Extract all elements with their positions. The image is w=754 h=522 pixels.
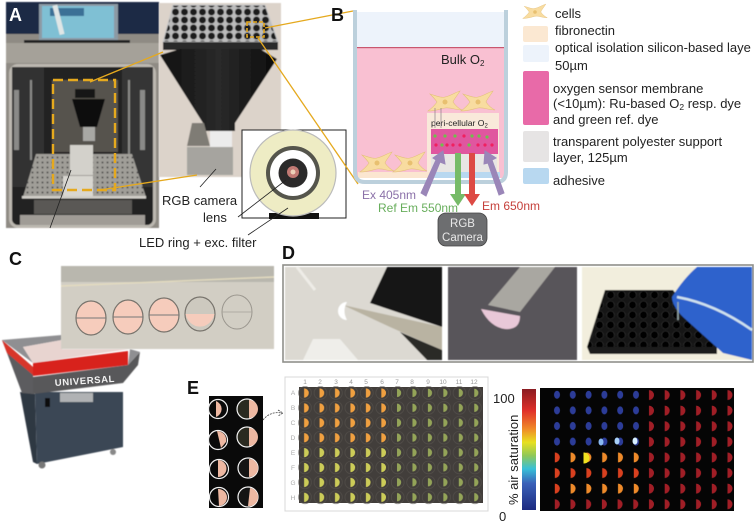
close-up sensor half-discs — [216, 400, 258, 506]
column numbers: 5 — [364, 379, 368, 386]
well halves, orange block — [297, 386, 390, 445]
column numbers: 3 — [334, 379, 338, 386]
panel B: legend — [523, 4, 751, 188]
excitation arrow right — [484, 151, 504, 195]
legend optical isolation layer: optical isolation silicon-based laye — [555, 40, 751, 55]
close-up wells right column — [237, 399, 258, 507]
column numbers: 10 — [439, 379, 447, 386]
column numbers: 9 — [426, 379, 430, 386]
label: bulk oxygen: Bulk O — [441, 52, 480, 67]
logo text: UNIVERSAL — [54, 374, 115, 389]
cream sensor pedestal — [427, 113, 499, 173]
label: excitation: Ex 405nm — [362, 188, 416, 202]
sensor disc 5 empty — [222, 295, 252, 329]
panel A: camera lens and LED ring inset — [242, 130, 346, 219]
sensor disc 1 — [76, 301, 106, 335]
row letters: G — [290, 480, 296, 487]
brightest wells — [584, 438, 638, 463]
legend oxygen sensor membrane: and green ref. dye — [553, 112, 659, 127]
legend adhesive: adhesive — [553, 173, 605, 188]
colour scale bar — [522, 389, 536, 510]
panel E: plate image — [285, 377, 488, 511]
well halves, green block — [390, 386, 483, 505]
panel D: photo frame — [283, 265, 753, 362]
legend adhesive — [523, 168, 605, 188]
legend cells — [523, 4, 582, 21]
label: reference emission: Ref Em 550nm — [378, 201, 458, 215]
legend oxygen sensor membrane: resp. dye — [684, 96, 741, 111]
row letters: D — [291, 435, 296, 442]
red emission arrow — [464, 153, 480, 206]
legend oxygen sensor membrane: 2 — [679, 102, 684, 112]
legend optical isolation layer: 50µm — [555, 58, 588, 73]
legend fibronectin: fibronectin — [555, 23, 615, 38]
oxygen sensor membrane with dye dots — [431, 129, 498, 154]
red-orange wells, row 6 — [565, 465, 644, 481]
panel E: oxygen heatmap — [540, 387, 734, 511]
legend oxygen sensor membrane — [523, 71, 741, 127]
RGB camera box: Camera — [442, 232, 484, 244]
column numbers: 4 — [349, 379, 353, 386]
scale max label: 100 — [493, 391, 515, 406]
panel D: gloved hand and plate photo — [582, 267, 752, 360]
connector lines in yellow — [90, 11, 358, 190]
reference emission arrow — [450, 153, 466, 206]
row letters: E — [291, 450, 296, 457]
panel A: incubator photo — [6, 2, 159, 228]
column numbers: 8 — [410, 379, 414, 386]
legend optical isolation layer — [523, 40, 751, 73]
sensor disc 4 half — [185, 297, 215, 331]
label: peri-cellular oxygen: peri-cellular O — [431, 118, 484, 128]
legend polyester layer — [523, 131, 722, 165]
optical isolation layer — [355, 12, 505, 48]
letter B: B — [331, 5, 344, 25]
legend cells: cells — [555, 6, 582, 21]
scale axis title: % air saturation — [506, 415, 521, 505]
column numbers: 1 — [303, 379, 307, 386]
legend polyester layer: layer, 125µm — [553, 150, 628, 165]
column numbers — [303, 379, 478, 386]
label: RGB camera lens: RGB camera — [162, 193, 238, 208]
panel E: small well close-up — [208, 396, 263, 508]
column numbers: 11 — [456, 379, 463, 386]
row letters: C — [291, 420, 296, 427]
row letters: A — [291, 390, 296, 397]
legend oxygen sensor membrane: (<10µm): Ru-based O — [553, 96, 679, 111]
panel D: tube with half-disc photo — [448, 267, 577, 360]
bottom row wells in red — [549, 496, 644, 511]
letter D: D — [282, 243, 295, 263]
label: bulk oxygen: 2 — [480, 59, 485, 68]
RGB camera box — [438, 213, 487, 246]
letter A: A — [9, 5, 22, 25]
column numbers: 7 — [395, 379, 399, 386]
dashed yellow selection box — [53, 80, 115, 190]
close-up wells left column — [208, 400, 228, 506]
label: peri-cellular oxygen: 2 — [484, 124, 488, 130]
column numbers: 12 — [470, 379, 478, 386]
column numbers: 2 — [318, 379, 322, 386]
RGB camera box: RGB — [450, 218, 475, 230]
panel B: well cross-section diagram — [355, 10, 540, 246]
letter C: C — [9, 249, 22, 269]
row letters: B — [291, 405, 295, 412]
legend oxygen sensor membrane: oxygen sensor membrane — [553, 81, 703, 96]
legend fibronectin — [523, 23, 615, 42]
row letters — [290, 390, 296, 502]
excitation arrow left — [421, 151, 445, 196]
sensor disc 3 — [149, 298, 179, 332]
panel C: laser cutter — [2, 335, 140, 468]
culture medium — [355, 48, 505, 178]
red-orange wells, row 6 and first column — [549, 449, 565, 496]
normoxic wells in orange, row 7 — [565, 481, 644, 496]
panel A: camera rig photo — [159, 3, 281, 177]
dashed yellow well marker — [247, 22, 264, 37]
normoxic wells in orange, row 5 — [565, 449, 644, 465]
label: LED ring: LED ring + exc. filter — [139, 235, 257, 250]
cells — [360, 91, 495, 172]
beaker wall — [355, 10, 506, 182]
row letters: F — [291, 465, 295, 472]
oxygen exchange arrows — [435, 108, 441, 128]
right block wells in red — [644, 387, 734, 511]
panel C: cut sensor discs photo — [61, 266, 274, 349]
panel A callout arrows — [50, 169, 288, 235]
well halves, yellow block — [297, 445, 390, 505]
hypoxic wells in blue — [549, 387, 644, 449]
legend polyester layer: transparent polyester support — [553, 134, 722, 149]
letter E: E — [187, 378, 199, 398]
sensor disc 2 — [113, 300, 143, 334]
panel D: tweezers photo — [285, 267, 442, 360]
label: emission: Em 650nm — [482, 199, 540, 213]
row letters: H — [291, 495, 296, 502]
panel E: arrow to plate — [263, 410, 283, 420]
column numbers: 6 — [380, 379, 384, 386]
label: lens: lens — [203, 210, 227, 225]
